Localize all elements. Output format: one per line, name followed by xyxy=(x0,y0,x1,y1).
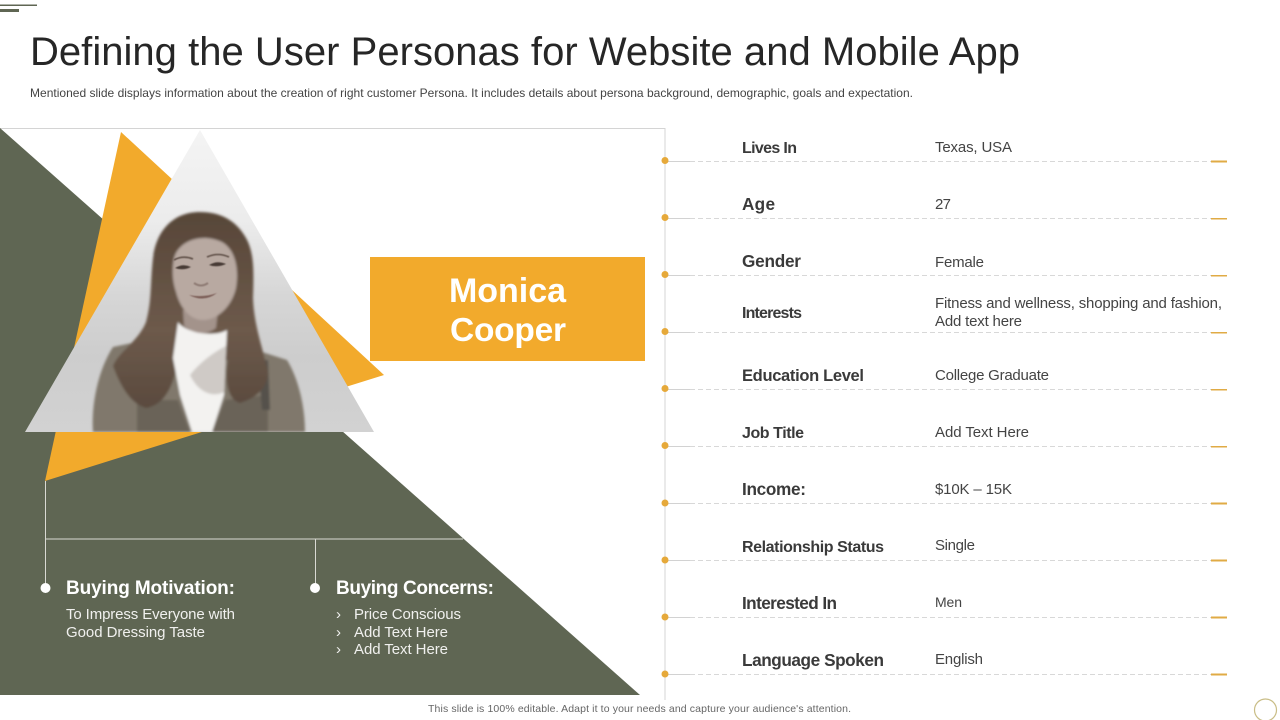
row: lives in xyxy=(662,139,1227,164)
panel: green background triangle xyxy=(0,128,640,695)
row: interests: Add text here xyxy=(935,313,1022,330)
row: language spoken: English xyxy=(935,651,983,668)
row: lives in: Texas, USA xyxy=(935,139,1012,156)
name banner: Cooper xyxy=(450,312,566,349)
buying concerns block: Add Text Here xyxy=(354,641,448,658)
row: gender: Gender xyxy=(742,251,801,271)
attribute rows xyxy=(662,139,1227,678)
brows xyxy=(174,257,193,260)
row: lives in: Lives In xyxy=(742,140,797,157)
nose xyxy=(194,283,208,286)
row: income: $10K – 15K xyxy=(935,481,1012,498)
persona photo in triangle xyxy=(25,130,375,432)
neck xyxy=(183,310,218,333)
name banner: Monica xyxy=(449,272,567,310)
name banner xyxy=(370,257,645,361)
row: age: 27 xyxy=(935,196,951,213)
eyes xyxy=(175,265,191,269)
row: relationship status: Relationship Status xyxy=(742,539,884,556)
row: language spoken xyxy=(662,650,1227,678)
row: education level: College Graduate xyxy=(935,367,1049,384)
buying concerns block: › xyxy=(336,624,341,641)
row: income: Income: xyxy=(742,479,806,499)
buying concerns block: › xyxy=(336,606,341,623)
row: interested in: Interested In xyxy=(742,593,837,613)
row: interests xyxy=(662,295,1227,335)
buying motivation block xyxy=(66,578,235,641)
row: interests: Fitness and wellness, shopping and fashion, xyxy=(935,295,1222,312)
panel frame lines xyxy=(0,128,666,700)
top-left accent lines xyxy=(0,4,37,12)
mouth xyxy=(189,293,217,299)
buying concerns block: Add Text Here xyxy=(354,624,448,641)
row: relationship status xyxy=(662,537,1227,564)
row: gender xyxy=(662,251,1227,278)
scarf xyxy=(173,322,227,432)
buying concerns block: Buying Concerns: xyxy=(336,578,494,599)
row: job title xyxy=(662,424,1227,449)
face xyxy=(173,238,237,320)
buying motivation block: To Impress Everyone with xyxy=(66,606,235,623)
row: gender: Female xyxy=(935,254,984,271)
subtitle: Mentioned slide displays information about the creation of right customer Persona. It includes details about persona background, demographic, goals and expectation. xyxy=(30,86,913,100)
jacket xyxy=(93,335,305,432)
buying motivation block: Buying Motivation: xyxy=(66,578,235,599)
row: interested in xyxy=(662,593,1227,620)
buying concerns block: Price Conscious xyxy=(354,606,461,623)
row: education level xyxy=(662,367,1227,392)
row: age: Age xyxy=(742,194,775,214)
connector lines and dots xyxy=(40,481,463,593)
buying concerns block: › xyxy=(336,641,341,658)
corner circle icon xyxy=(1254,699,1276,720)
footer note: This slide is 100% editable. Adapt it to your needs and capture your audience's attention. xyxy=(428,703,851,715)
row: age xyxy=(662,194,1227,221)
buying concerns block xyxy=(336,578,494,658)
row: relationship status: Single xyxy=(935,537,975,554)
orange accent triangle xyxy=(45,132,384,481)
title: Defining the User Personas for Website and Mobile App xyxy=(30,30,1020,74)
row: interested in: Men xyxy=(935,594,962,610)
row: income xyxy=(662,479,1227,506)
row: education level: Education Level xyxy=(742,367,864,385)
row: job title: Add Text Here xyxy=(935,424,1029,441)
buying motivation block: Good Dressing Taste xyxy=(66,624,205,641)
row: language spoken: Language Spoken xyxy=(742,650,884,670)
row: job title: Job Title xyxy=(742,425,804,442)
row: interests: Interests xyxy=(742,305,802,322)
hair back xyxy=(113,212,268,408)
